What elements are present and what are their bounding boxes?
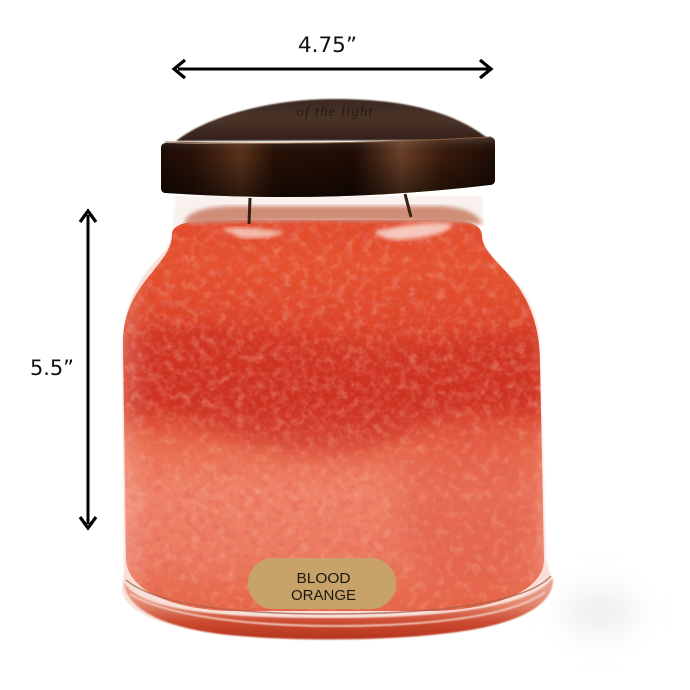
product label [248,558,396,609]
lid [161,99,495,197]
headspace wax tone [184,206,482,224]
mottled wax texture [110,215,560,615]
lid band [161,137,495,197]
neck wax highlights [222,228,285,238]
product label: BLOOD [296,571,350,587]
product label: ORANGE [291,588,356,604]
wax fill [110,215,560,620]
width dimension arrow [174,60,491,78]
lid dome [176,99,490,141]
glass base [124,578,553,639]
wicks [249,194,411,224]
height label: 5.5” [30,356,74,380]
candle jar [110,194,560,640]
jar cast shadow [564,590,636,634]
width label: 4.75” [298,33,357,57]
lid engraving: of the light [296,104,374,120]
glass body outline [122,234,553,640]
dark red band [120,325,545,455]
height dimension arrow [80,211,96,528]
glass neck [172,196,484,226]
lower right red wash [396,436,543,588]
